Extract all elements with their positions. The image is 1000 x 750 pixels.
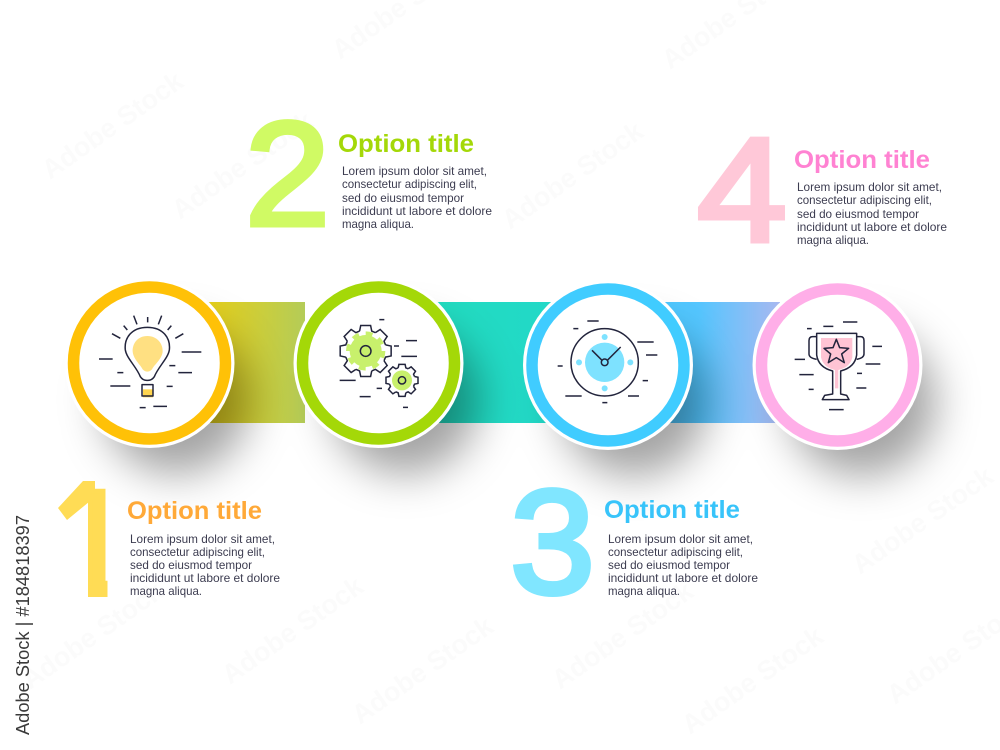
watermark pattern: Adobe Stock [166, 105, 319, 225]
number 1: 1 [52, 458, 135, 626]
body 2 [342, 164, 492, 231]
icon: light bulb [99, 316, 201, 408]
watermark pattern: Adobe Stock [496, 115, 649, 235]
watermark pattern: Adobe Stock [846, 460, 999, 580]
circle 2: green ring [294, 278, 464, 448]
body 4: incididunt ut labore et dolore [797, 220, 947, 234]
watermark pattern: Adobe Stock [36, 65, 189, 185]
icon: clock [558, 321, 657, 403]
body 4 [797, 180, 947, 247]
number 2: 2 [245, 92, 330, 257]
circle 3: blue ring [523, 280, 693, 450]
body 3: consectetur adipiscing elit, [608, 545, 743, 559]
body 4: sed do eiusmod tempor [797, 207, 919, 221]
number 4: 4 [697, 108, 787, 273]
band: connecting ribbon [205, 302, 780, 423]
body 2: sed do eiusmod tempor [342, 191, 464, 205]
title 2: Option title [338, 130, 474, 158]
body 3: incididunt ut labore et dolore [608, 571, 758, 585]
circle 1: yellow ring [64, 278, 234, 448]
circle shadows [102, 326, 936, 476]
watermark pattern: Adobe Stock [676, 620, 829, 740]
watermark pattern: Adobe Stock [546, 575, 699, 695]
body 3: magna aliqua. [608, 584, 680, 598]
body 1 [130, 532, 280, 598]
body 4: Lorem ipsum dolor sit amet, [797, 180, 942, 194]
body 4: magna aliqua. [797, 233, 869, 247]
number 1 [58, 481, 108, 597]
body 2: magna aliqua. [342, 217, 414, 231]
body 1: sed do eiusmod tempor [130, 558, 252, 572]
watermark pattern: Adobe Stock [16, 575, 169, 695]
title 4: Option title [794, 146, 930, 174]
icon: trophy [795, 322, 882, 410]
body 2: incididunt ut labore et dolore [342, 204, 492, 218]
step 1 text [58, 481, 280, 598]
body 1: Lorem ipsum dolor sit amet, [130, 532, 275, 546]
body 1: incididunt ut labore et dolore [130, 571, 280, 585]
step 2 text [245, 92, 492, 257]
circle 4: pink ring [752, 280, 922, 450]
icon: gears [340, 320, 418, 407]
body 1: magna aliqua. [130, 584, 202, 598]
body 2: consectetur adipiscing elit, [342, 177, 477, 191]
step 3 text [510, 460, 758, 625]
body 1: consectetur adipiscing elit, [130, 545, 265, 559]
body 4: consectetur adipiscing elit, [797, 193, 932, 207]
body 3 [608, 532, 758, 598]
body 2: Lorem ipsum dolor sit amet, [342, 164, 487, 178]
number 3: 3 [510, 460, 595, 625]
stock id side label: Adobe Stock | #184818397 [13, 515, 33, 735]
watermark pattern: Adobe Stock [216, 570, 369, 690]
body 3: Lorem ipsum dolor sit amet, [608, 532, 753, 546]
body 3: sed do eiusmod tempor [608, 558, 730, 572]
step 4 text [697, 108, 947, 273]
watermark pattern: Adobe Stock [346, 610, 499, 730]
title 1: Option title [127, 497, 262, 525]
title 3: Option title [604, 496, 740, 524]
